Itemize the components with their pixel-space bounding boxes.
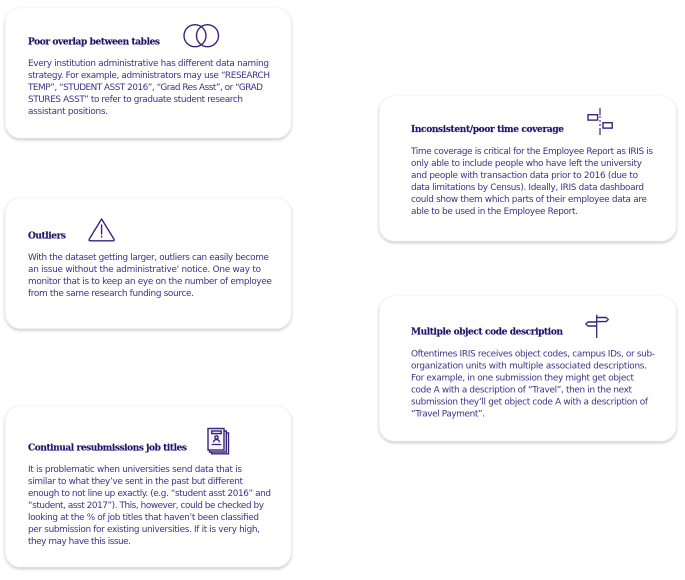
text block: time coverage body: and people with transaction data prior to 2016 (due to bbox=[411, 171, 638, 181]
text block: multiple object code body: code A with a description of “Travel”, then in the next bbox=[411, 386, 633, 396]
text block: time coverage body: only able to include people who have left the university bbox=[411, 159, 642, 169]
text block: time coverage body: data limitations by Census). Ideally, IRIS data dashboard bbox=[411, 183, 644, 193]
text block: time coverage body: could show them which parts of their employee data are bbox=[411, 195, 647, 205]
panel: multiple object code description bbox=[380, 296, 676, 441]
text block: poor overlap body: STURES ASST” to refer to graduate student research bbox=[28, 95, 243, 105]
text block: continual resubmissions body: they may have this issue. bbox=[28, 537, 131, 547]
text block: poor overlap body: assistant positions. bbox=[28, 107, 108, 117]
text block: multiple object code body bbox=[411, 350, 655, 420]
text block: continual resubmissions body: enough to not line up exactly. (e.g. “student asst 2016” and bbox=[28, 489, 271, 499]
icon: overlapping circles bbox=[184, 25, 218, 47]
text block: time coverage body: Time coverage is critical for the Employee Report as IRIS is bbox=[410, 147, 653, 157]
heading: outliers: Outliers bbox=[28, 232, 66, 242]
text block: time coverage body: able to be used in the Employee Report. bbox=[411, 207, 578, 217]
panel: continual resubmissions job titles bbox=[6, 406, 291, 567]
text block: multiple object code body: Oftentimes IRIS receives object codes, campus IDs, or sub- bbox=[411, 350, 655, 360]
text block: time coverage body bbox=[410, 147, 653, 217]
text block: poor overlap body: TEMP”, “STUDENT ASST 2016”, “Grad Res Asst”, or “GRAD bbox=[27, 83, 263, 93]
icon: signpost bbox=[586, 315, 608, 338]
heading: poor overlap: Poor overlap between tables bbox=[28, 38, 160, 48]
icon: aligned boxes bbox=[588, 108, 612, 135]
text block: multiple object code body: organization units with multiple associated descriptions. bbox=[411, 362, 647, 372]
panel: outliers bbox=[6, 198, 291, 328]
text block: multiple object code body: submission they’ll get object code A with a description of bbox=[411, 398, 649, 408]
text block: continual resubmissions body: per submission for existing universities. If it is very high, bbox=[28, 525, 260, 535]
text block: poor overlap body bbox=[27, 59, 270, 117]
text block: poor overlap body: Every institution administrative has different data naming bbox=[28, 59, 269, 69]
icon: warning triangle bbox=[89, 219, 114, 241]
text block: continual resubmissions body: similar to what they’ve sent in the past but different bbox=[28, 477, 244, 487]
heading: continual resubmissions: Continual resubmissions job titles bbox=[28, 444, 187, 454]
panel: inconsistent/poor time coverage bbox=[380, 96, 676, 241]
heading: multiple object code: Multiple object code description bbox=[411, 328, 563, 338]
text block: outliers body: With the dataset getting larger, outliers can easily become bbox=[28, 253, 269, 263]
text block: continual resubmissions body: It is problematic when universities send data that is bbox=[28, 465, 242, 475]
panel: poor overlap between tables bbox=[6, 8, 291, 138]
text block: outliers body: monitor that is to keep an eye on the number of employee bbox=[28, 277, 272, 287]
text block: continual resubmissions body bbox=[28, 465, 271, 547]
text block: continual resubmissions body: “student, asst 2017”). This, however, could be checked by bbox=[28, 501, 264, 511]
text block: outliers body: from the same research funding source. bbox=[28, 289, 194, 299]
text block: outliers body: an issue without the administrative' notice. One way to bbox=[28, 265, 261, 275]
text block: outliers body bbox=[28, 253, 272, 299]
icon: document stack bbox=[208, 428, 228, 454]
text block: continual resubmissions body: looking at the % of job titles that haven’t been classified bbox=[28, 513, 259, 523]
text block: multiple object code body: For example, in one submission they might get object bbox=[411, 374, 635, 384]
text block: poor overlap body: strategy. For example, administrators may use “RESEARCH bbox=[28, 71, 270, 81]
text block: multiple object code body: “Travel Payment”. bbox=[411, 410, 485, 420]
heading: time coverage: Inconsistent/poor time coverage bbox=[411, 125, 564, 135]
